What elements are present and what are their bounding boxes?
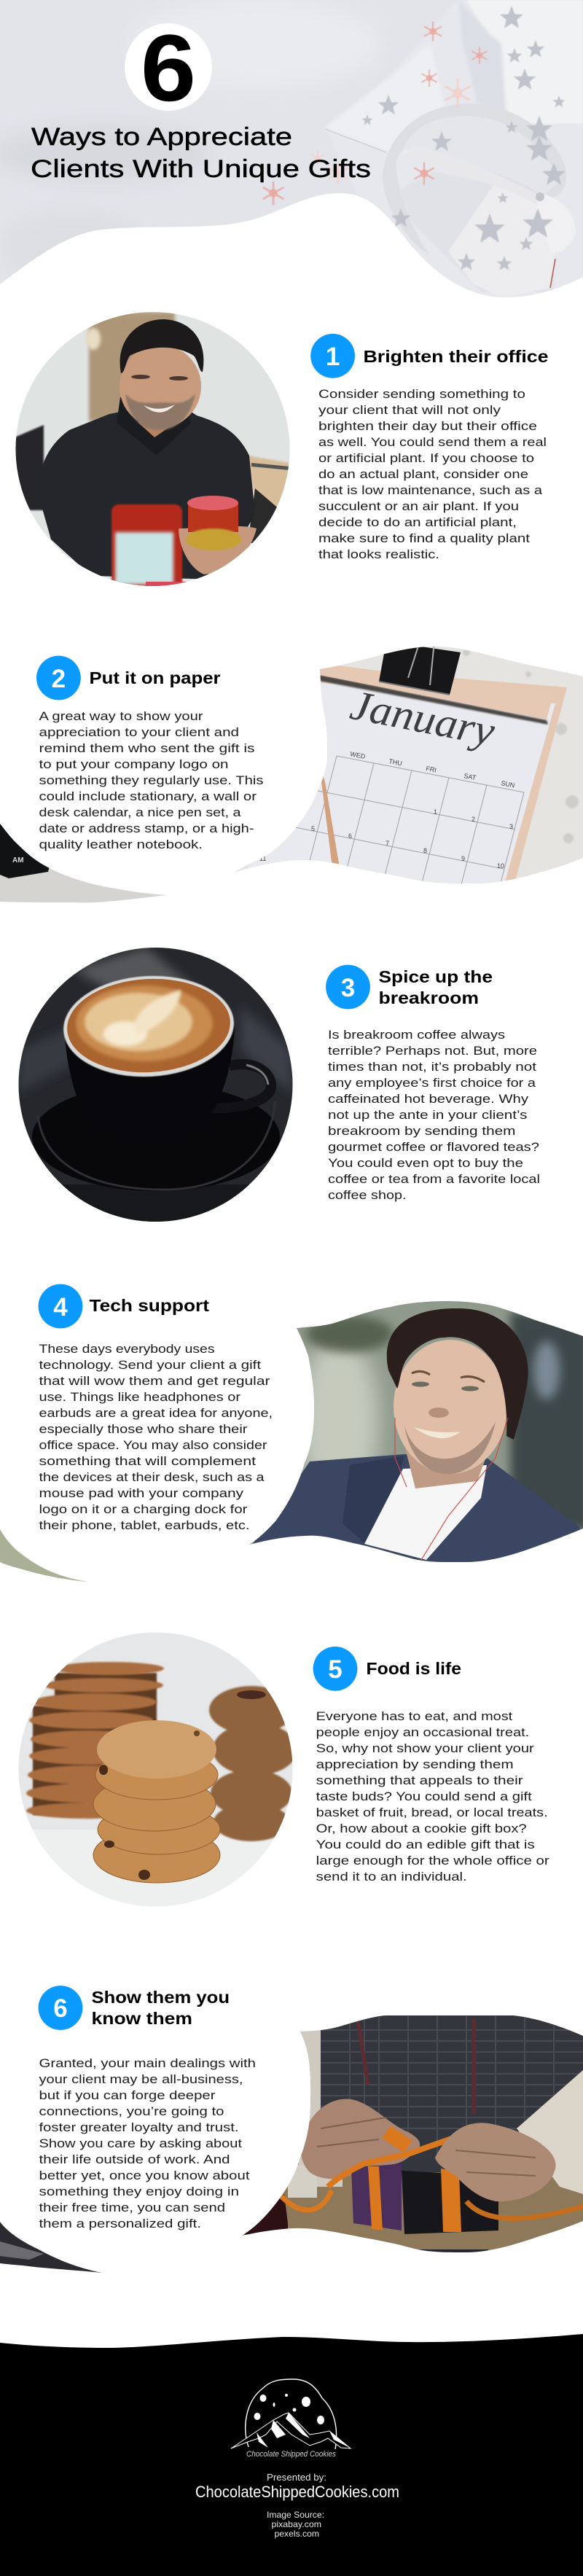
body text: something that appeals to their	[316, 1773, 523, 1787]
number badge 4	[39, 1284, 82, 1328]
panel: 1 brighten their office	[15, 312, 548, 592]
body text: use. Things like headphones or	[39, 1390, 240, 1404]
body text: that is low maintenance, such as a	[318, 483, 543, 497]
photo: hands tying ribbon on gift box	[240, 2012, 583, 2260]
title: Ways to Appreciate	[31, 123, 292, 151]
image sources: Image Source:	[267, 2510, 324, 2520]
title	[31, 123, 371, 183]
photo: january calendar on clipboard: 3	[509, 823, 513, 830]
photo: january calendar on clipboard: 9	[461, 855, 465, 862]
panel: 5 food is life	[15, 1629, 549, 1917]
body text: logo on it or a charging dock for	[39, 1502, 248, 1516]
image sources: pexels.com	[274, 2529, 319, 2539]
logo wordmark: Chocolate Shipped Cookies	[246, 2450, 336, 2459]
image sources: pixabay.com	[271, 2519, 321, 2529]
image sources	[267, 2510, 324, 2539]
photo: stacks of cookies	[15, 1629, 299, 1917]
photo: man with earbuds	[240, 1297, 583, 1567]
body text: date or address stamp, or a high-	[39, 821, 254, 835]
body text: basket of fruit, bread, or local treats.	[316, 1806, 548, 1819]
photo: january calendar on clipboard: 6	[348, 832, 352, 840]
body text: office space. You may also consider	[39, 1438, 267, 1452]
heading: Brighten their office	[363, 347, 548, 366]
title number 6: 6	[141, 15, 196, 121]
body text: taste buds? You could send a gift	[316, 1789, 532, 1803]
body text: You could do an edible gift that is	[316, 1838, 535, 1851]
body text: succulent or an air plant. If you	[318, 499, 519, 513]
photo fragment: greenery	[0, 1529, 89, 1582]
body text: make sure to find a quality plant	[318, 531, 530, 545]
panel: 6 show them you know them	[0, 1986, 583, 2278]
body text: large enough for the whole office or	[316, 1854, 549, 1867]
body text: remind them who sent the gift is	[39, 741, 255, 755]
body text: coffee shop.	[328, 1188, 407, 1202]
body text: that will wow them and get regular	[39, 1374, 270, 1388]
body text: any employee’s first choice for a	[328, 1076, 536, 1090]
body text: desk calendar, a nice pen set, a	[39, 805, 241, 819]
weekday labels	[350, 750, 515, 789]
number badge 3	[326, 965, 370, 1009]
photo: january calendar on clipboard	[235, 646, 583, 883]
presented by credit: ChocolateShippedCookies.com	[195, 2483, 399, 2501]
body text	[328, 1028, 540, 1202]
body text: something they enjoy doing in	[39, 2185, 239, 2198]
month script: January	[347, 681, 499, 755]
photo: january calendar on clipboard: 8	[423, 847, 427, 854]
number badge 1: 1	[326, 343, 340, 371]
body text: their phone, tablet, earbuds, etc.	[39, 1518, 249, 1532]
body text: your client that will not only	[318, 403, 501, 417]
body text: but if you can forge deeper	[39, 2088, 216, 2102]
photo: january calendar on clipboard: 5	[311, 825, 315, 832]
body text: as well. You could send them a real	[318, 435, 547, 449]
number badge 6: 6	[53, 1994, 68, 2023]
body text: people enjoy an occasional treat.	[316, 1725, 529, 1739]
number badge 5	[313, 1647, 357, 1691]
body text: So, why not show your client your	[316, 1741, 534, 1755]
body text: breakroom by sending them	[328, 1124, 516, 1138]
body text: something that will complement	[39, 1454, 256, 1468]
heading: know them	[92, 2009, 192, 2028]
body text: A great way to show your	[39, 709, 203, 723]
photo: january calendar on clipboard: 2	[472, 816, 475, 823]
body text: appreciation by sending them	[316, 1757, 514, 1771]
body text: something they regularly use. This	[39, 773, 264, 787]
photo fragment: dark tabletop	[0, 2222, 102, 2273]
body text: quality leather notebook.	[39, 838, 203, 851]
body text: or artificial plant. If you choose to	[318, 451, 534, 465]
panel: 2 put it on paper	[0, 641, 583, 926]
heading	[379, 967, 493, 1007]
body text: Is breakroom coffee always	[328, 1028, 505, 1042]
body text: Consider sending something to	[318, 387, 525, 401]
footer panel	[0, 2334, 583, 2576]
body text: connections, you’re going to	[39, 2104, 224, 2118]
body text: earbuds are a great idea for anyone,	[39, 1406, 273, 1420]
heading: breakroom	[379, 988, 479, 1007]
body text: especially those who share their	[39, 1422, 248, 1436]
body text: brighten their day but their office	[318, 419, 537, 433]
body text	[316, 1709, 549, 1884]
body text: gourmet coffee or flavored teas?	[328, 1140, 539, 1154]
body text	[39, 709, 264, 851]
photo: january calendar on clipboard: 7	[386, 840, 389, 847]
weekday labels: SUN	[501, 779, 515, 789]
body text: their free time, you can send	[39, 2201, 225, 2214]
panel: 3 spice up the breakroom	[15, 944, 540, 1228]
title: Clients With Unique Gifts	[31, 155, 371, 183]
weekday labels: WED	[350, 750, 367, 760]
weekday labels: THU	[388, 757, 403, 767]
body text: Or, how about a cookie gift box?	[316, 1822, 527, 1835]
heading: Tech support	[89, 1296, 209, 1315]
photo: january calendar on clipboard: 11	[259, 855, 266, 862]
body text: that looks realistic.	[318, 547, 439, 561]
number badge 2: 2	[52, 665, 66, 693]
panel: 4 tech support	[0, 1284, 583, 1585]
heading: Show them you	[92, 1988, 230, 2007]
body text: technology. Send your client a gift	[39, 1358, 261, 1372]
body text: decide to do an artificial plant,	[318, 515, 517, 529]
body text: to put your company logo on	[39, 757, 229, 771]
body text: times than not, it’s probably not	[328, 1060, 536, 1074]
body text: coffee or tea from a favorite local	[328, 1172, 540, 1186]
logo: cookie and mountains	[231, 2379, 351, 2459]
hero white wave	[0, 193, 583, 313]
body text: Everyone has to eat, and most	[316, 1709, 513, 1723]
number badge 1	[310, 334, 355, 378]
photo: man holding gift tins	[15, 312, 292, 592]
heading: Put it on paper	[89, 668, 221, 687]
body text: appreciation to your client and	[39, 725, 239, 739]
body text	[39, 2056, 256, 2230]
body text: terrible? Perhaps not. But, more	[328, 1044, 537, 1058]
number badge 3: 3	[341, 974, 355, 1002]
body text: their life outside of work. And	[39, 2152, 230, 2166]
heading: Food is life	[366, 1659, 461, 1678]
number badge 2	[36, 656, 81, 700]
body text: not up the ante in your client’s	[328, 1108, 528, 1122]
body text: mouse pad with your company	[39, 1486, 244, 1500]
number badge 5: 5	[328, 1655, 343, 1684]
body text: These days everybody uses	[39, 1342, 214, 1356]
heading	[92, 1988, 230, 2028]
presented by credit	[195, 2472, 399, 2501]
number badge 4: 4	[53, 1293, 68, 1322]
weekday labels: SAT	[463, 772, 477, 781]
photo: january calendar on clipboard: 1	[434, 808, 437, 816]
body text: send it to an individual.	[316, 1870, 467, 1884]
photo: latte in black cup	[15, 944, 299, 1228]
photo fragment: device on stone	[0, 820, 171, 904]
photo fragment: device on stone: AM	[12, 856, 24, 864]
photo: january calendar on clipboard: 10	[497, 862, 504, 870]
body text: Granted, your main dealings with	[39, 2056, 256, 2070]
body text: better yet, once you know about	[39, 2169, 250, 2182]
body text: the devices at their desk, such as a	[39, 1470, 265, 1484]
heading: Spice up the	[379, 967, 493, 986]
presented by credit: Presented by:	[267, 2472, 326, 2483]
body text	[318, 387, 547, 561]
title number 6	[125, 15, 212, 121]
body text: do an actual plant, consider one	[318, 467, 528, 481]
hero photo: wrapped gift with star ribbon	[0, 0, 583, 300]
body text: could include stationary, a wall or	[39, 789, 257, 803]
body text: them a personalized gift.	[39, 2217, 201, 2230]
body text: your client may be all-business,	[39, 2072, 243, 2086]
body text: caffeinated hot beverage. Why	[328, 1092, 529, 1106]
body text: foster greater loyalty and trust.	[39, 2120, 239, 2134]
body text	[39, 1342, 273, 1532]
body text: You could even opt to buy the	[328, 1156, 523, 1170]
body text: Show you care by asking about	[39, 2136, 242, 2150]
number badge 6	[39, 1986, 82, 2030]
weekday labels: FRI	[426, 765, 437, 774]
